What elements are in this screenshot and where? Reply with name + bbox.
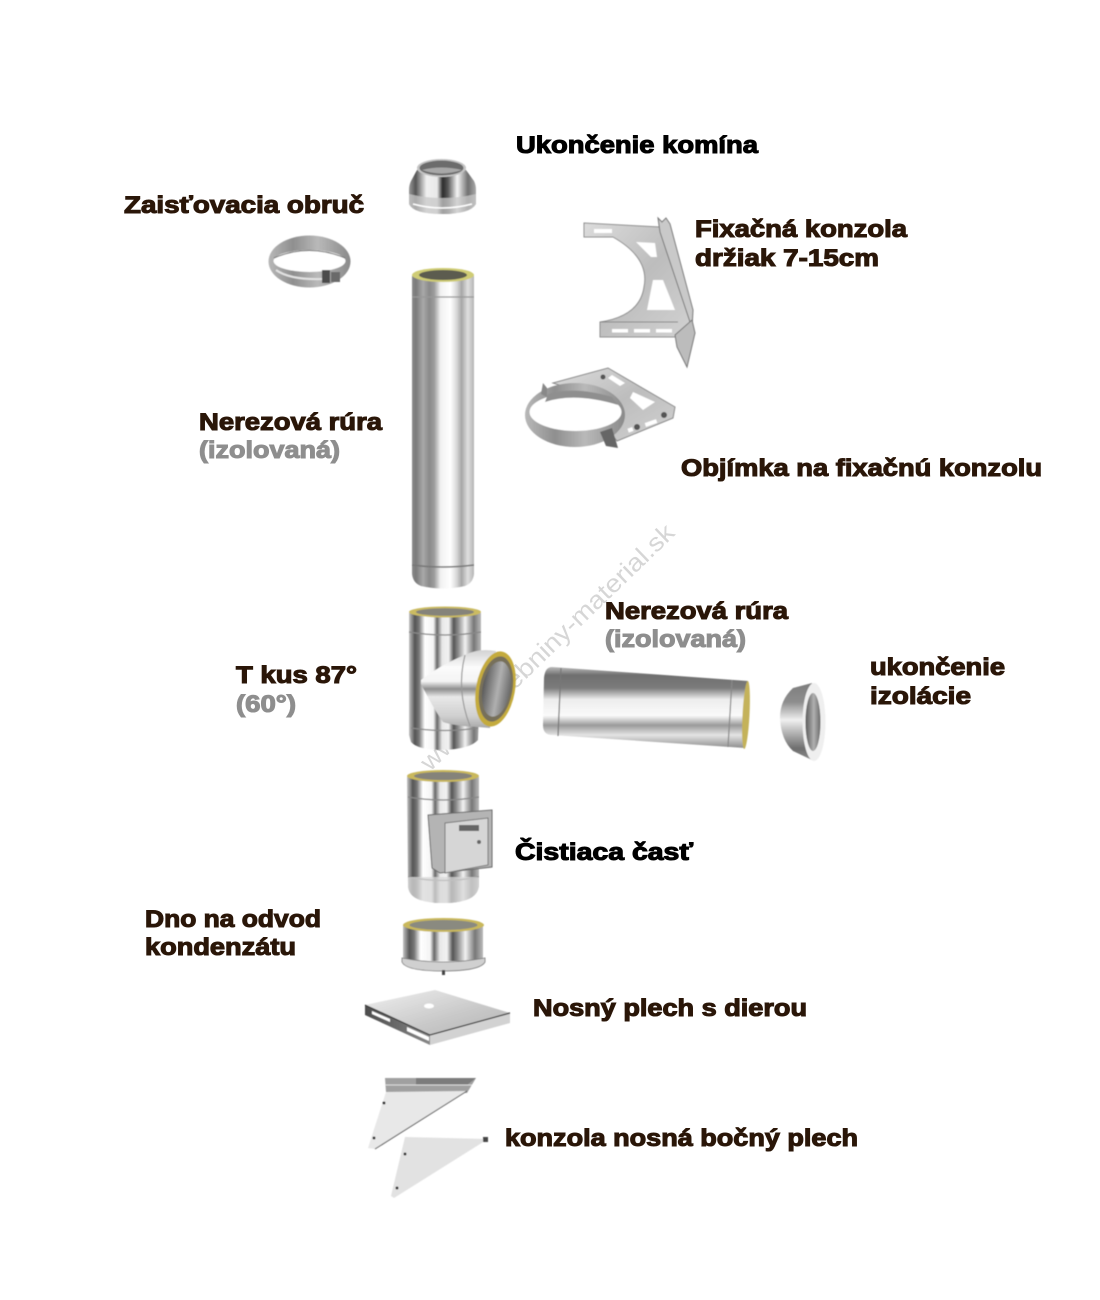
label: insulation end: ukončenie: [870, 654, 1005, 681]
label: support plate: Nosný plech s dierou: [533, 995, 807, 1022]
icon: bracket collar: [525, 368, 675, 448]
label: collar: Objímka na fixačnú konzolu: [681, 455, 1042, 482]
watermark: www.stavebniny-material.sk: [414, 518, 681, 777]
label: cleaning section: Čistiaca časť: [515, 838, 694, 866]
label: T piece: T kus 87°: [236, 662, 357, 689]
label: stainless pipe horizontal: (izolovaná): [605, 626, 746, 653]
label: fixing bracket: držiak 7-15cm: [695, 245, 879, 272]
label: fixing bracket: Fixačná konzola: [695, 216, 908, 243]
icon: horizontal insulated pipe: [543, 667, 751, 749]
label: locking ring: Zaisťovacia obruč: [124, 192, 364, 219]
label: condensate base: kondenzátu: [145, 934, 296, 961]
icon: support plate with hole: [365, 990, 510, 1045]
icon: side support brackets: [368, 1078, 488, 1198]
icon: condensate drain base: [402, 918, 485, 975]
icon: chimney cap: [409, 159, 476, 214]
icon: locking ring clamp: [268, 236, 350, 288]
label: stainless pipe horizontal: [605, 598, 789, 653]
label: chimney end: Ukončenie komína: [516, 132, 759, 159]
label: stainless pipe vertical: Nerezová rúra: [199, 409, 383, 436]
icon: wall bracket: [584, 218, 695, 367]
label: condensate base: [145, 906, 321, 961]
icon: T piece 87 degrees: [409, 606, 521, 750]
icon: main insulated pipe: [412, 268, 474, 588]
label: condensate base: Dno na odvod: [145, 906, 321, 933]
label: side brackets: konzola nosná bočný plech: [505, 1125, 858, 1152]
label: stainless pipe vertical: [199, 409, 383, 464]
icon: cleaning section with door: [407, 770, 492, 903]
label: fixing bracket: [695, 216, 908, 272]
label: insulation end: [870, 654, 1005, 710]
label: T piece: [236, 662, 357, 718]
label: insulation end: izolácie: [870, 683, 971, 710]
icon: insulation end ring: [780, 683, 826, 761]
label: T piece: (60°): [236, 691, 296, 718]
label: stainless pipe horizontal: Nerezová rúra: [605, 598, 789, 625]
label: stainless pipe vertical: (izolovaná): [199, 437, 340, 464]
